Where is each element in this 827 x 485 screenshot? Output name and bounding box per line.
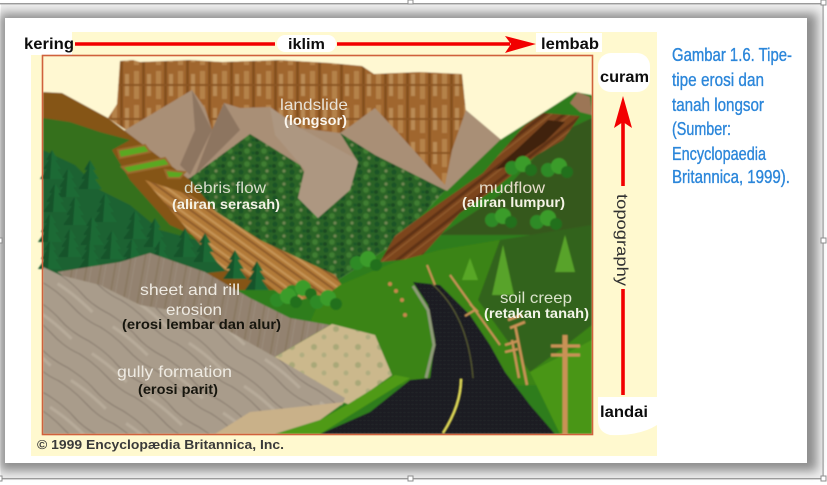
label: mudflow	[462, 180, 565, 210]
caption	[672, 45, 792, 187]
rock outcrop	[570, 92, 592, 115]
sky	[43, 56, 592, 434]
left hill green patches	[43, 118, 215, 270]
caption: tipe erosi dan	[672, 70, 764, 90]
white patch behind kering	[31, 32, 72, 55]
label: kering: kering	[24, 36, 74, 53]
label: landslide	[280, 97, 348, 128]
mid green lawn	[300, 240, 592, 385]
label: soil creep: (retakan tanah)	[484, 306, 589, 321]
vertical axis: topography	[598, 53, 657, 435]
label: topography: topography	[613, 194, 630, 286]
arrowhead	[505, 36, 536, 53]
label: debris flow: debris flow	[184, 180, 266, 197]
label: debris flow	[172, 180, 280, 212]
small young trees	[462, 235, 575, 295]
upper hill dark zone	[440, 118, 592, 235]
picture panel: cream background	[31, 32, 657, 456]
label: gully formation	[117, 364, 232, 397]
gully slope	[43, 267, 345, 434]
label: debris flow: (aliran serasah)	[172, 197, 280, 212]
landscape illustration	[38, 56, 592, 434]
label: gully formation: (erosi parit)	[138, 382, 218, 397]
ground base	[43, 190, 592, 434]
debris flow	[145, 180, 345, 302]
left hill	[43, 92, 300, 290]
label: mudflow: (aliran lumpur)	[462, 195, 565, 210]
label: sheet and rill erosion: (erosi lembar dan alur)	[122, 317, 281, 332]
road verge stripe	[413, 286, 434, 378]
road verge	[275, 375, 410, 434]
copyright: © 1999 Encyclopædia Britannica, Inc.	[37, 437, 284, 452]
sand patch	[275, 324, 392, 405]
forest slope	[150, 133, 445, 285]
sheet and rill mound	[57, 253, 330, 357]
conifer trees on left hill	[38, 150, 269, 290]
bright lower right grass	[530, 340, 592, 434]
roadside markers	[388, 282, 407, 317]
road centre line	[443, 379, 461, 433]
caption: Encyclopaedia	[672, 144, 767, 164]
landslide scar	[270, 107, 358, 218]
caption: Gambar 1.6. Tipe-	[672, 45, 792, 65]
scene labels	[117, 97, 589, 397]
road	[320, 282, 555, 434]
label: landslide: (longsor)	[284, 113, 347, 128]
caption: tanah longsor	[672, 95, 764, 115]
label: sheet and rill erosion: sheet and rill	[140, 282, 240, 299]
leaning utility poles	[427, 265, 580, 434]
beige mountains	[122, 90, 505, 200]
right green hillside	[300, 92, 592, 434]
label: landai: landai	[600, 404, 648, 421]
label: soil creep: soil creep	[500, 290, 572, 307]
caption: Britannica, 1999).	[672, 167, 790, 187]
mudflow shadow	[495, 120, 565, 170]
terraces	[118, 145, 185, 178]
mesa cliffs	[108, 60, 466, 190]
mudflow	[380, 113, 580, 262]
label: gully formation: gully formation	[117, 364, 232, 381]
caption: (Sumber:	[672, 119, 731, 139]
mountain shading	[180, 90, 240, 175]
label: iklim: iklim	[288, 36, 325, 53]
label: mudflow: mudflow	[479, 180, 545, 197]
sandy toe	[215, 402, 345, 434]
dark soil-creep area	[478, 225, 592, 372]
label: soil creep	[484, 290, 589, 321]
label: landslide: landslide	[280, 97, 348, 114]
label: lembab: lembab	[541, 36, 599, 53]
label: curam: curam	[600, 69, 649, 86]
bushes	[270, 156, 573, 310]
label: sheet and rill erosion: erosion	[166, 302, 222, 319]
arrowhead	[614, 96, 632, 128]
dense conifer mass	[43, 150, 235, 285]
label: sheet and rill erosion	[122, 282, 281, 332]
picture border	[42, 56, 592, 434]
horizontal axis: iklim	[24, 33, 602, 53]
